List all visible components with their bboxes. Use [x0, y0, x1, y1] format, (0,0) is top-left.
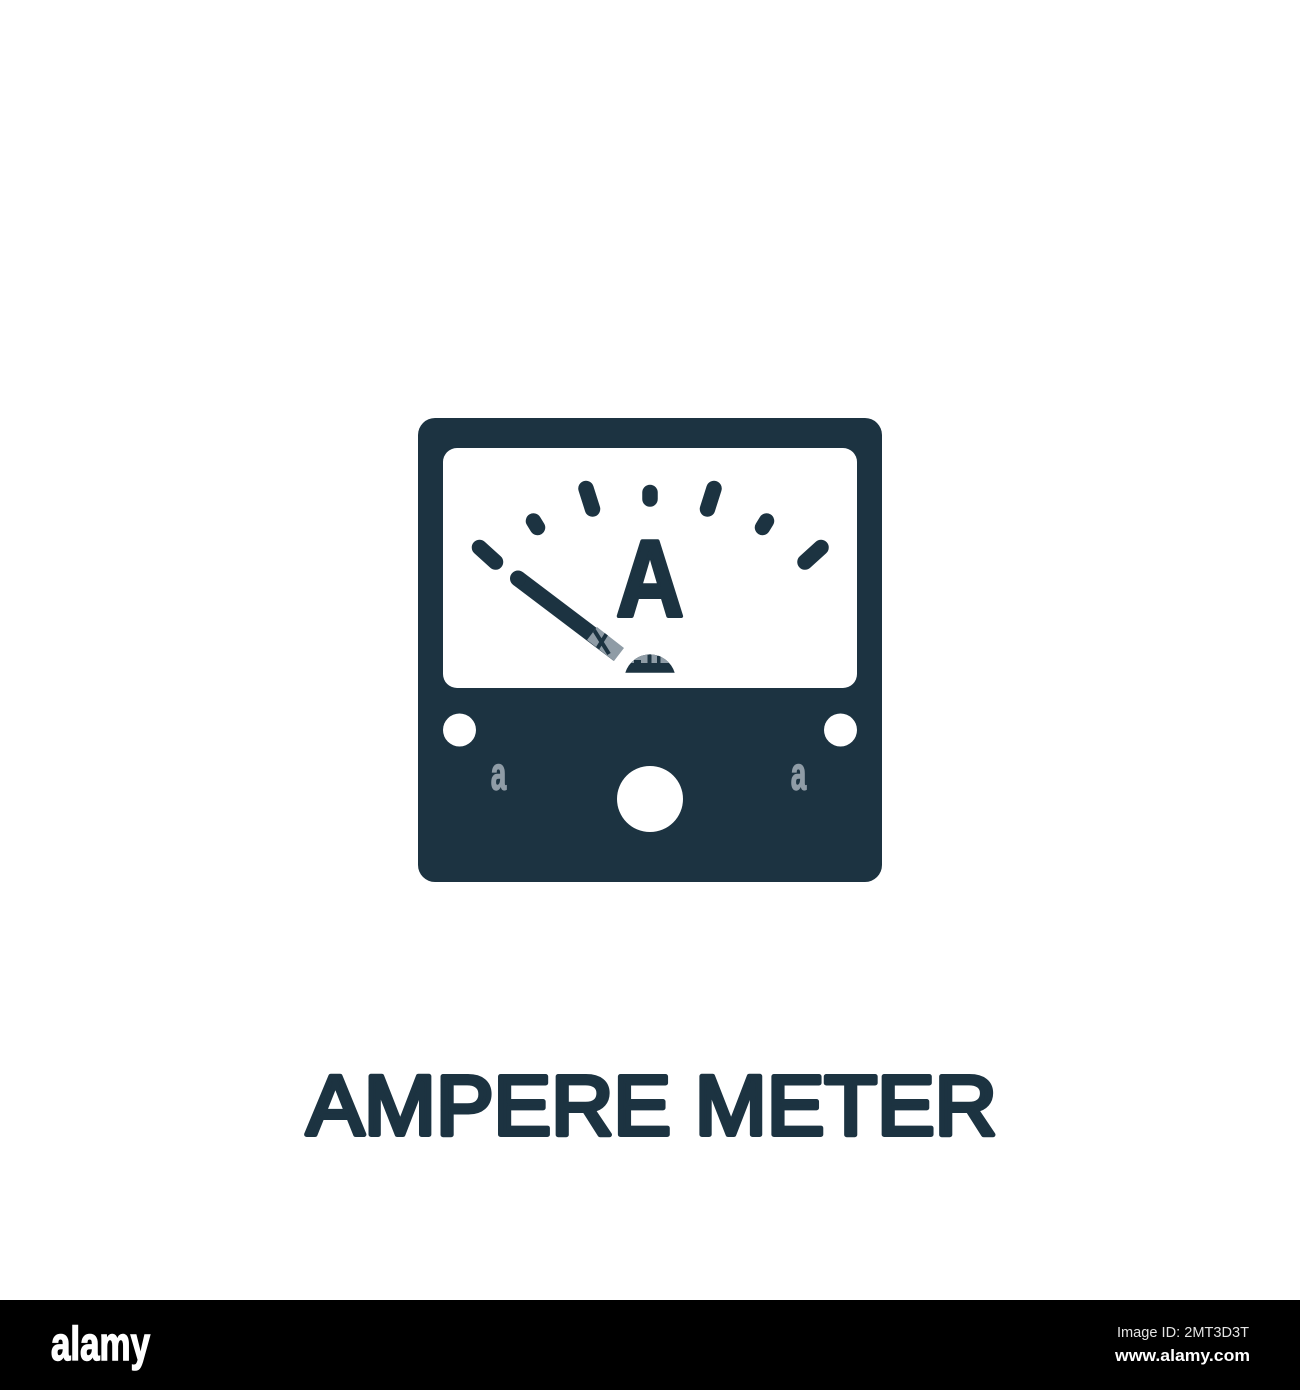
adjustment knob	[617, 766, 683, 832]
dial window	[443, 448, 857, 688]
website: www.alamy.com	[1114, 1347, 1250, 1365]
footer bar	[0, 1300, 1300, 1390]
unit letter A: A	[616, 517, 684, 640]
right screw	[824, 714, 857, 746]
title: AMPERE METER	[306, 1058, 997, 1152]
footer logo: alamy	[51, 1317, 150, 1370]
meter body	[418, 418, 882, 882]
watermark letter right: a	[791, 749, 807, 800]
needle	[510, 570, 625, 663]
needle pivot	[625, 654, 675, 673]
left screw	[443, 714, 476, 746]
dial scale ticks	[480, 488, 821, 562]
image id: Image ID: 2MT3D3T	[1117, 1324, 1249, 1341]
icon: ampere meter	[418, 418, 882, 882]
watermark letter left: a	[491, 749, 507, 800]
